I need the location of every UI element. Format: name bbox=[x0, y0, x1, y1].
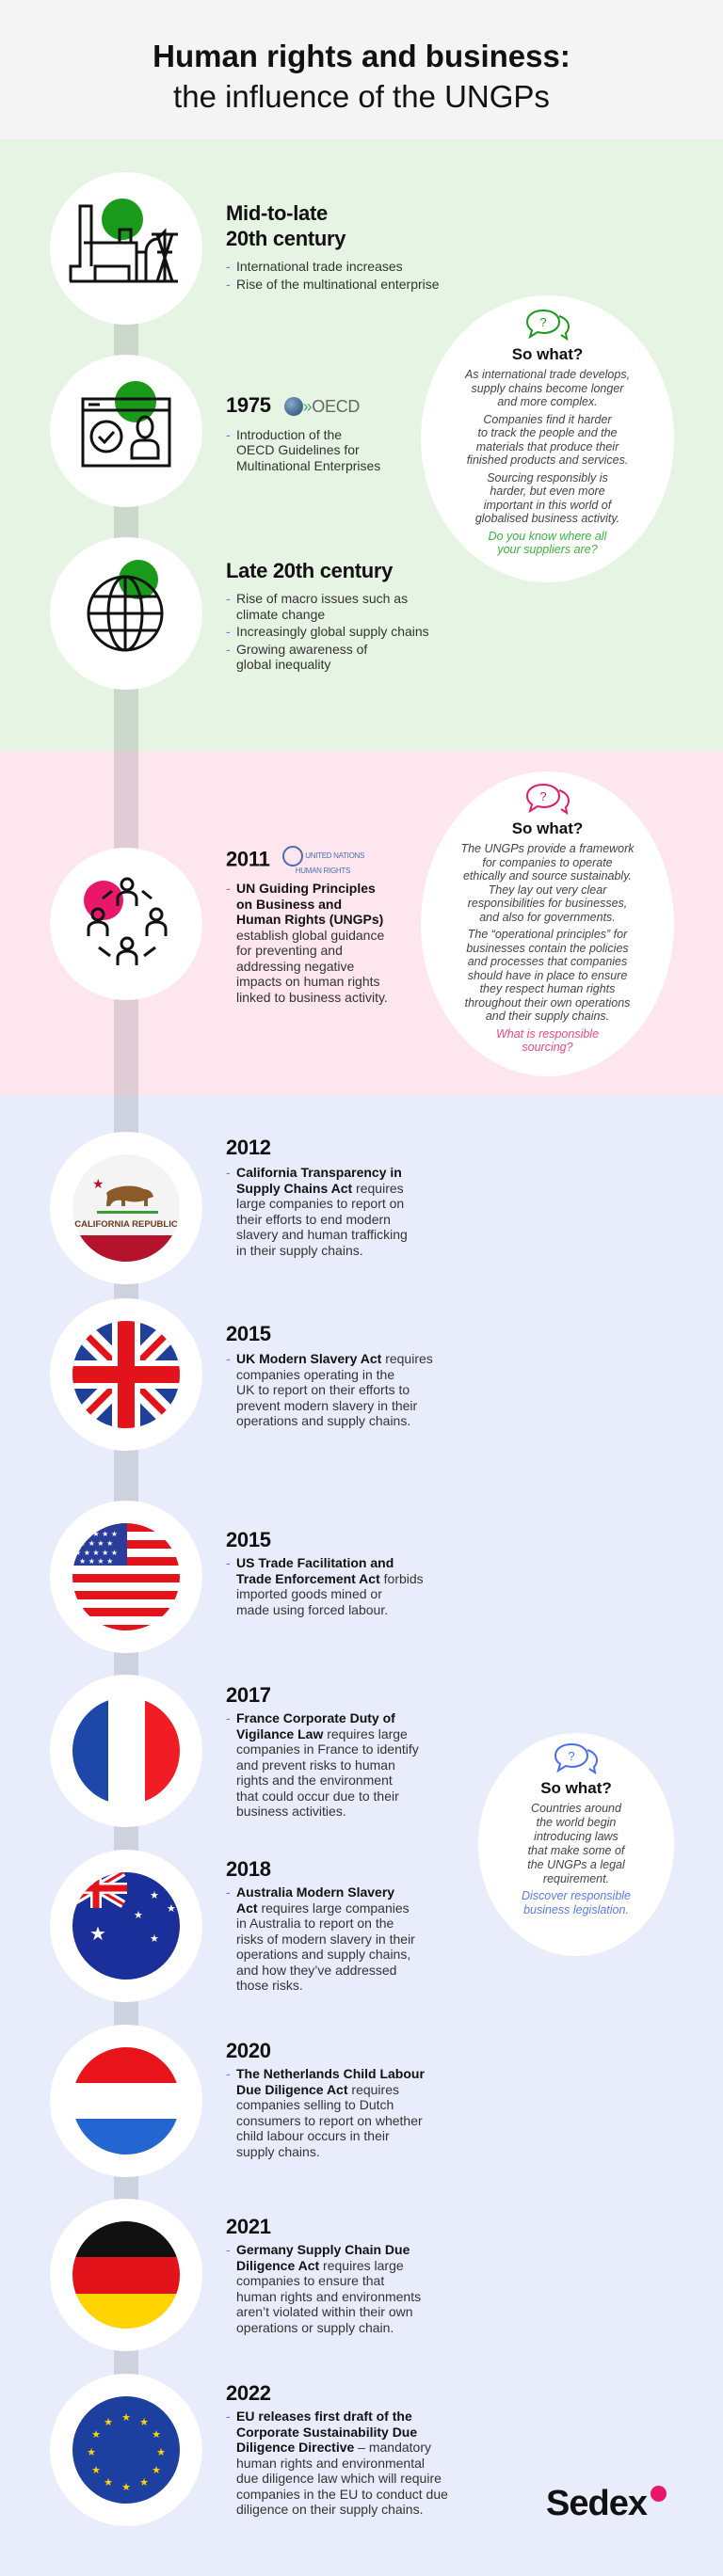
item: 2017 France: France Corporate Duty of bbox=[236, 1710, 395, 1725]
item: 2020 Netherlands: The Netherlands Child Labour bbox=[236, 2066, 425, 2081]
item: 2018 Australia: 2018 bbox=[226, 1857, 271, 1881]
circle: Germany flag bbox=[50, 2199, 202, 2351]
item: 2020 Netherlands: companies selling to Dutch bbox=[236, 2097, 394, 2112]
item: 1975 OECD: Multinational Enterprises bbox=[236, 458, 380, 473]
item: 2012 California bbox=[226, 1136, 408, 1258]
circle: France flag bbox=[50, 1675, 202, 1827]
item: 2012 California: slavery and human trafficking bbox=[236, 1227, 408, 1242]
callout: so what (green): important in this world of bbox=[484, 499, 611, 512]
circle: US flag: ★ ★ ★ ★ bbox=[79, 1539, 113, 1548]
circle: US flag: ★ ★ ★ ★ bbox=[79, 1557, 113, 1566]
item: 1975 OECD: OECD Guidelines for bbox=[236, 442, 360, 457]
circle: EU flag: ★ bbox=[87, 2446, 96, 2458]
item: 1975 OECD: 1975 bbox=[226, 393, 271, 417]
circle: US flag: ★ ★ ★ ★ ★ bbox=[74, 1530, 118, 1538]
circle: EU flag: ★ bbox=[152, 2464, 161, 2476]
section: green background bbox=[0, 139, 723, 751]
circle: Australia flag: ★ bbox=[89, 1922, 106, 1945]
item: 2022 EU: Diligence Directive – mandatory bbox=[236, 2440, 431, 2455]
item: 2017 France: business activities. bbox=[236, 1804, 346, 1819]
item: 2022 EU: EU releases first draft of the bbox=[236, 2409, 412, 2424]
callout: so what (pink): and their supply chains. bbox=[486, 1010, 609, 1023]
item: 2018 Australia: operations and supply chains, bbox=[236, 1947, 410, 1962]
circle: Australia flag: ★ bbox=[167, 1902, 176, 1915]
callout: so what (blue): Discover responsible bbox=[522, 1889, 631, 1902]
callout: so what (green): supply chains become longer bbox=[472, 382, 623, 395]
circle: EU flag: ★ bbox=[121, 2481, 131, 2493]
item: 2015 UK: prevent modern slavery in their bbox=[236, 1398, 417, 1413]
item: 1975 OECD: »OECD bbox=[303, 397, 360, 416]
callout: so what (green): your suppliers are? bbox=[497, 543, 598, 556]
item: late 20th century: Increasingly global supply chains bbox=[236, 624, 429, 639]
circle: people icon bbox=[50, 848, 202, 1000]
callout: so what (pink): responsibilities for businesses, bbox=[468, 897, 627, 910]
item: 2015 US: Trade Enforcement Act forbids bbox=[236, 1571, 424, 1586]
circle: Australia flag: ★ bbox=[134, 1909, 143, 1921]
circle: EU flag bbox=[50, 2374, 202, 2526]
item: 2020 Netherlands: 2020 bbox=[226, 2039, 271, 2062]
item: 2021 Germany: 2021 bbox=[226, 2215, 271, 2238]
callout: so what (pink): They lay out very clear bbox=[489, 883, 606, 896]
item: 2011 UNGPs: on Business and bbox=[236, 896, 342, 911]
item: 2018 Australia: risks of modern slavery in their bbox=[236, 1931, 415, 1946]
item: 2020 Netherlands: supply chains. bbox=[236, 2143, 320, 2158]
item: 2012 California: California Transparency in bbox=[236, 1165, 402, 1180]
item: 2011 UNGPs: HUMAN RIGHTS bbox=[296, 867, 350, 875]
item: 2011 UNGPs: linked to business activity. bbox=[236, 990, 388, 1005]
item: 2015 UK: companies operating in the bbox=[236, 1366, 394, 1381]
item: 2011 UNGPs: Human Rights (UNGPs) bbox=[236, 912, 383, 927]
item: 1975 OECD bbox=[226, 393, 380, 473]
item: 2018 Australia: and how they’ve addressed bbox=[236, 1963, 396, 1978]
item: 2011 UNGPs: impacts on human rights bbox=[236, 974, 380, 989]
icon: speech bubbles blue: ? bbox=[568, 1749, 575, 1763]
item: 2012 California: Supply Chains Act requires bbox=[236, 1180, 404, 1195]
callout: so what (green): finished products and services. bbox=[467, 453, 628, 467]
callout: so what (green): Sourcing responsibly is bbox=[487, 470, 608, 484]
item: 2011 UNGPs: UN Guiding Principles bbox=[236, 881, 376, 896]
circle: California flag: CALIFORNIA REPUBLIC bbox=[74, 1219, 178, 1230]
icon: speech bubbles blue bbox=[554, 1743, 598, 1774]
callout: so what (pink): ethically and source sustainably. bbox=[463, 869, 632, 883]
icon: speech bubbles pink: ? bbox=[539, 789, 546, 803]
callout: so what (blue): the world begin bbox=[537, 1816, 616, 1829]
callout: so what (pink): What is responsible bbox=[496, 1027, 599, 1041]
circle: EU flag: ★ bbox=[139, 2416, 149, 2428]
item: 2022 EU: diligence on their supply chains. bbox=[236, 2502, 423, 2517]
callout: so what (pink): businesses contain the policies bbox=[466, 941, 629, 954]
circle: EU flag: ★ bbox=[91, 2428, 101, 2441]
callout: so what (blue): So what? bbox=[540, 1779, 612, 1797]
callout: so what (pink): The UNGPs provide a framework bbox=[460, 842, 635, 855]
item: 2011 UNGPs: establish global guidance bbox=[236, 928, 384, 943]
item: 2015 UK: operations and supply chains. bbox=[236, 1413, 410, 1428]
icon: speech bubbles green bbox=[526, 310, 570, 341]
circle: EU flag: ★ bbox=[121, 2411, 131, 2424]
callout: so what (blue): requirement. bbox=[543, 1872, 609, 1885]
item: 2017 France: 2017 bbox=[226, 1683, 271, 1707]
item: 2021 Germany: Diligence Act requires large bbox=[236, 2258, 404, 2273]
item: 2022 EU: Corporate Sustainability Due bbox=[236, 2424, 417, 2439]
callout: so what (green) bbox=[421, 295, 674, 582]
item: 2012 California: 2012 bbox=[226, 1136, 271, 1159]
item: 2015 UK: UK Modern Slavery Act requires bbox=[236, 1351, 433, 1366]
callout: so what (green): globalised business activity. bbox=[475, 512, 619, 525]
callout: so what (green): to track the people and the bbox=[477, 426, 618, 439]
item: 2015 US: made using forced labour. bbox=[236, 1601, 388, 1616]
item: 2017 France: and prevent risks to human bbox=[236, 1757, 395, 1773]
item: 2020 Netherlands bbox=[226, 2039, 425, 2159]
timeline bar bbox=[114, 248, 138, 2450]
circle: Australia flag: ★ bbox=[150, 1889, 159, 1901]
callout: so what (pink): So what? bbox=[512, 819, 583, 837]
item: 2011 UNGPs: UNITED NATIONS bbox=[305, 851, 364, 860]
item: 2015 US: imported goods mined or bbox=[236, 1586, 382, 1601]
item: 2018 Australia: Act requires large companies bbox=[236, 1900, 410, 1916]
callout: so what (pink): should have in place to ensure bbox=[468, 969, 627, 982]
section: blue background bbox=[0, 1096, 723, 2576]
item: 2012 California: their efforts to end modern bbox=[236, 1212, 391, 1227]
item: late 20th century: Rise of macro issues such as bbox=[236, 591, 408, 606]
item: 2012 California: in their supply chains. bbox=[236, 1242, 363, 1257]
item: 2011 UNGPs bbox=[226, 846, 388, 1005]
callout: so what (blue): business legislation. bbox=[523, 1902, 629, 1916]
callout: so what (blue): introducing laws bbox=[534, 1830, 619, 1843]
circle: US flag: ★ ★ ★ ★ ★ bbox=[74, 1549, 118, 1557]
item: 2020 Netherlands: child labour occurs in their bbox=[236, 2128, 390, 2143]
item: late 20th century: global inequality bbox=[236, 657, 330, 672]
item: 2017 France: companies in France to identify bbox=[236, 1741, 419, 1757]
item: 2017 France: Vigilance Law requires large bbox=[236, 1725, 408, 1741]
title: the influence of the UNGPs bbox=[173, 79, 550, 114]
item: 2011 UNGPs: 2011 bbox=[226, 847, 270, 870]
header bbox=[0, 0, 723, 139]
item: mid-to-late 20th century: International trade increases bbox=[236, 259, 403, 274]
item: 2022 EU: 2022 bbox=[226, 2381, 271, 2405]
item: 2021 Germany: Germany Supply Chain Due bbox=[236, 2242, 410, 2257]
callout: so what (pink) bbox=[421, 771, 674, 1076]
callout: so what (pink): for companies to operate bbox=[482, 856, 613, 869]
title: Human rights and business: bbox=[153, 39, 570, 73]
callout: so what (blue): that make some of bbox=[528, 1844, 624, 1857]
item: 2018 Australia: Australia Modern Slavery bbox=[236, 1884, 394, 1900]
item: 2015 US: US Trade Facilitation and bbox=[236, 1555, 394, 1570]
item: 2022 EU bbox=[226, 2381, 448, 2517]
callout: so what (green): Do you know where all bbox=[489, 529, 606, 542]
circle: Australia flag: ★ bbox=[150, 1932, 159, 1945]
item: 2021 Germany: human rights and environments bbox=[236, 2288, 421, 2303]
item: mid-to-late 20th century bbox=[226, 201, 440, 292]
callout: so what (blue): the UNGPs a legal bbox=[527, 1858, 625, 1871]
circle: Netherlands flag bbox=[50, 2025, 202, 2177]
item: mid-to-late 20th century: Mid-to-late bbox=[226, 201, 328, 225]
item: 2011 UNGPs: for preventing and bbox=[236, 943, 343, 958]
circle: US flag bbox=[50, 1501, 202, 1653]
circle: UK flag bbox=[50, 1298, 202, 1451]
item: late 20th century: climate change bbox=[236, 606, 325, 621]
section: pink background bbox=[0, 751, 723, 1096]
circle: EU flag: ★ bbox=[156, 2446, 166, 2458]
callout: so what (pink): throughout their own operations bbox=[465, 995, 630, 1009]
item: 2012 California: large companies to report on bbox=[236, 1196, 404, 1211]
item: 2017 France: rights and the environment bbox=[236, 1773, 393, 1788]
callout: so what (blue): Countries around bbox=[531, 1802, 621, 1815]
circle: EU flag: ★ bbox=[139, 2476, 149, 2489]
item: mid-to-late 20th century: Rise of the multinational enterprise bbox=[236, 277, 440, 292]
item: late 20th century: Late 20th century bbox=[226, 559, 393, 582]
item: late 20th century bbox=[226, 559, 429, 672]
icon: speech bubbles green: ? bbox=[539, 315, 546, 329]
callout: so what (green): materials that produce their bbox=[476, 440, 619, 453]
callout: so what (green): As international trade develops, bbox=[465, 368, 630, 381]
item: 2015 US: 2015 bbox=[226, 1528, 271, 1551]
item: mid-to-late 20th century: 20th century bbox=[226, 227, 345, 250]
item: 2015 UK: UK to report on their efforts to bbox=[236, 1382, 410, 1397]
icon: speech bubbles pink bbox=[526, 784, 570, 815]
circle: EU flag: ★ bbox=[91, 2464, 101, 2476]
circle: Australia flag bbox=[50, 1850, 202, 2002]
item: 2022 EU: companies in the EU to conduct due bbox=[236, 2486, 448, 2501]
callout: so what (pink): sourcing? bbox=[522, 1041, 573, 1054]
item: 2015 UK: 2015 bbox=[226, 1322, 271, 1345]
item: 2020 Netherlands: Due Diligence Act requires bbox=[236, 2081, 399, 2096]
callout: so what (pink): The “operational principles” for bbox=[468, 928, 627, 941]
callout: so what (pink): and processes that companies bbox=[468, 955, 627, 968]
item: 2021 Germany bbox=[226, 2215, 421, 2335]
callout: so what (pink): and also for governments. bbox=[479, 911, 616, 924]
item: 2020 Netherlands: consumers to report on whether bbox=[236, 2113, 423, 2128]
callout: so what (green): Companies find it harder bbox=[483, 412, 612, 425]
callout: so what (green): harder, but even more bbox=[490, 485, 605, 498]
circle: California flag: ★ bbox=[92, 1177, 104, 1192]
circle: browser icon bbox=[50, 355, 202, 507]
item: 2021 Germany: operations or supply chain. bbox=[236, 2320, 394, 2335]
item: 2011 UNGPs: addressing negative bbox=[236, 958, 354, 973]
item: 2022 EU: due diligence law which will require bbox=[236, 2471, 442, 2486]
item: 2018 Australia: in Australia to report on the bbox=[236, 1916, 394, 1931]
circle: California flag bbox=[50, 1132, 202, 1284]
item: 2021 Germany: companies to ensure that bbox=[236, 2273, 384, 2288]
item: 2018 Australia bbox=[226, 1857, 415, 1993]
circle: EU flag: ★ bbox=[104, 2476, 113, 2489]
circle: globe icon bbox=[50, 537, 202, 690]
callout: so what (blue) bbox=[478, 1733, 674, 1956]
item: 2017 France: that could occur due to their bbox=[236, 1788, 399, 1803]
item: 1975 OECD: Introduction of the bbox=[236, 427, 342, 442]
callout: so what (pink): they respect human rights bbox=[480, 982, 615, 995]
title bbox=[153, 39, 570, 114]
circle: EU flag: ★ bbox=[104, 2416, 113, 2428]
item: 2022 EU: human rights and environmental bbox=[236, 2456, 425, 2471]
item: 2015 UK bbox=[226, 1322, 433, 1428]
callout: so what (green): and more complex. bbox=[497, 395, 598, 408]
item: 2021 Germany: aren’t violated within their own bbox=[236, 2304, 413, 2319]
item: 2017 France bbox=[226, 1683, 419, 1819]
item: 2015 US bbox=[226, 1528, 424, 1617]
circle: factory icon bbox=[50, 172, 202, 325]
item: late 20th century: Growing awareness of bbox=[236, 642, 367, 657]
callout: so what (green): So what? bbox=[512, 345, 583, 363]
item: 2018 Australia: those risks. bbox=[236, 1978, 303, 1993]
circle: EU flag: ★ bbox=[152, 2428, 161, 2441]
logo: Sedex: Sedex bbox=[546, 2484, 647, 2523]
